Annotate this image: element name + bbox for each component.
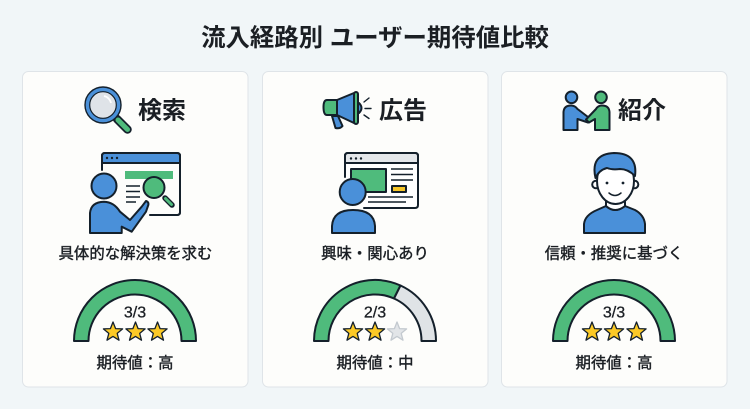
icon: megaphone [324,92,371,128]
text: 興味・関心あり: 興味・関心あり [321,244,429,262]
icon: person viewing ad window [332,153,418,233]
gauge: 2/3 [314,280,436,341]
heading: 広告: 広告 [379,98,427,124]
score: 3/3 [124,304,146,322]
label: 期待値 高: 期待値：高 [576,354,652,372]
icon: magnifier [85,87,128,130]
text: 具体的な解決策を求む: 具体的な解決策を求む [59,244,212,262]
icon: person pointing at search window [90,153,180,233]
panel: 紹介 [502,72,727,387]
heading: 紹介: 紹介 [618,98,666,124]
title: 流入経路別 ユーザー期待値比較 [201,25,549,52]
stars [343,322,407,340]
heading: 検索: 検索 [138,98,186,124]
icon: smiling person [584,153,645,233]
score: 3/3 [603,304,625,322]
gauge: 3/3 [74,280,196,341]
score: 2/3 [364,304,386,322]
icon: handshake [564,92,610,130]
panel: 広告 [262,72,488,387]
stars [582,322,646,340]
gauge: 3/3 [553,280,675,341]
stars [103,322,167,340]
label: 期待値 高: 期待値：高 [97,354,173,372]
panel: 検索 [22,72,248,387]
label: 期待値 中: 期待値：中 [337,354,413,372]
text: 信頼・推奨に基づく: 信頼・推奨に基づく [545,244,683,262]
